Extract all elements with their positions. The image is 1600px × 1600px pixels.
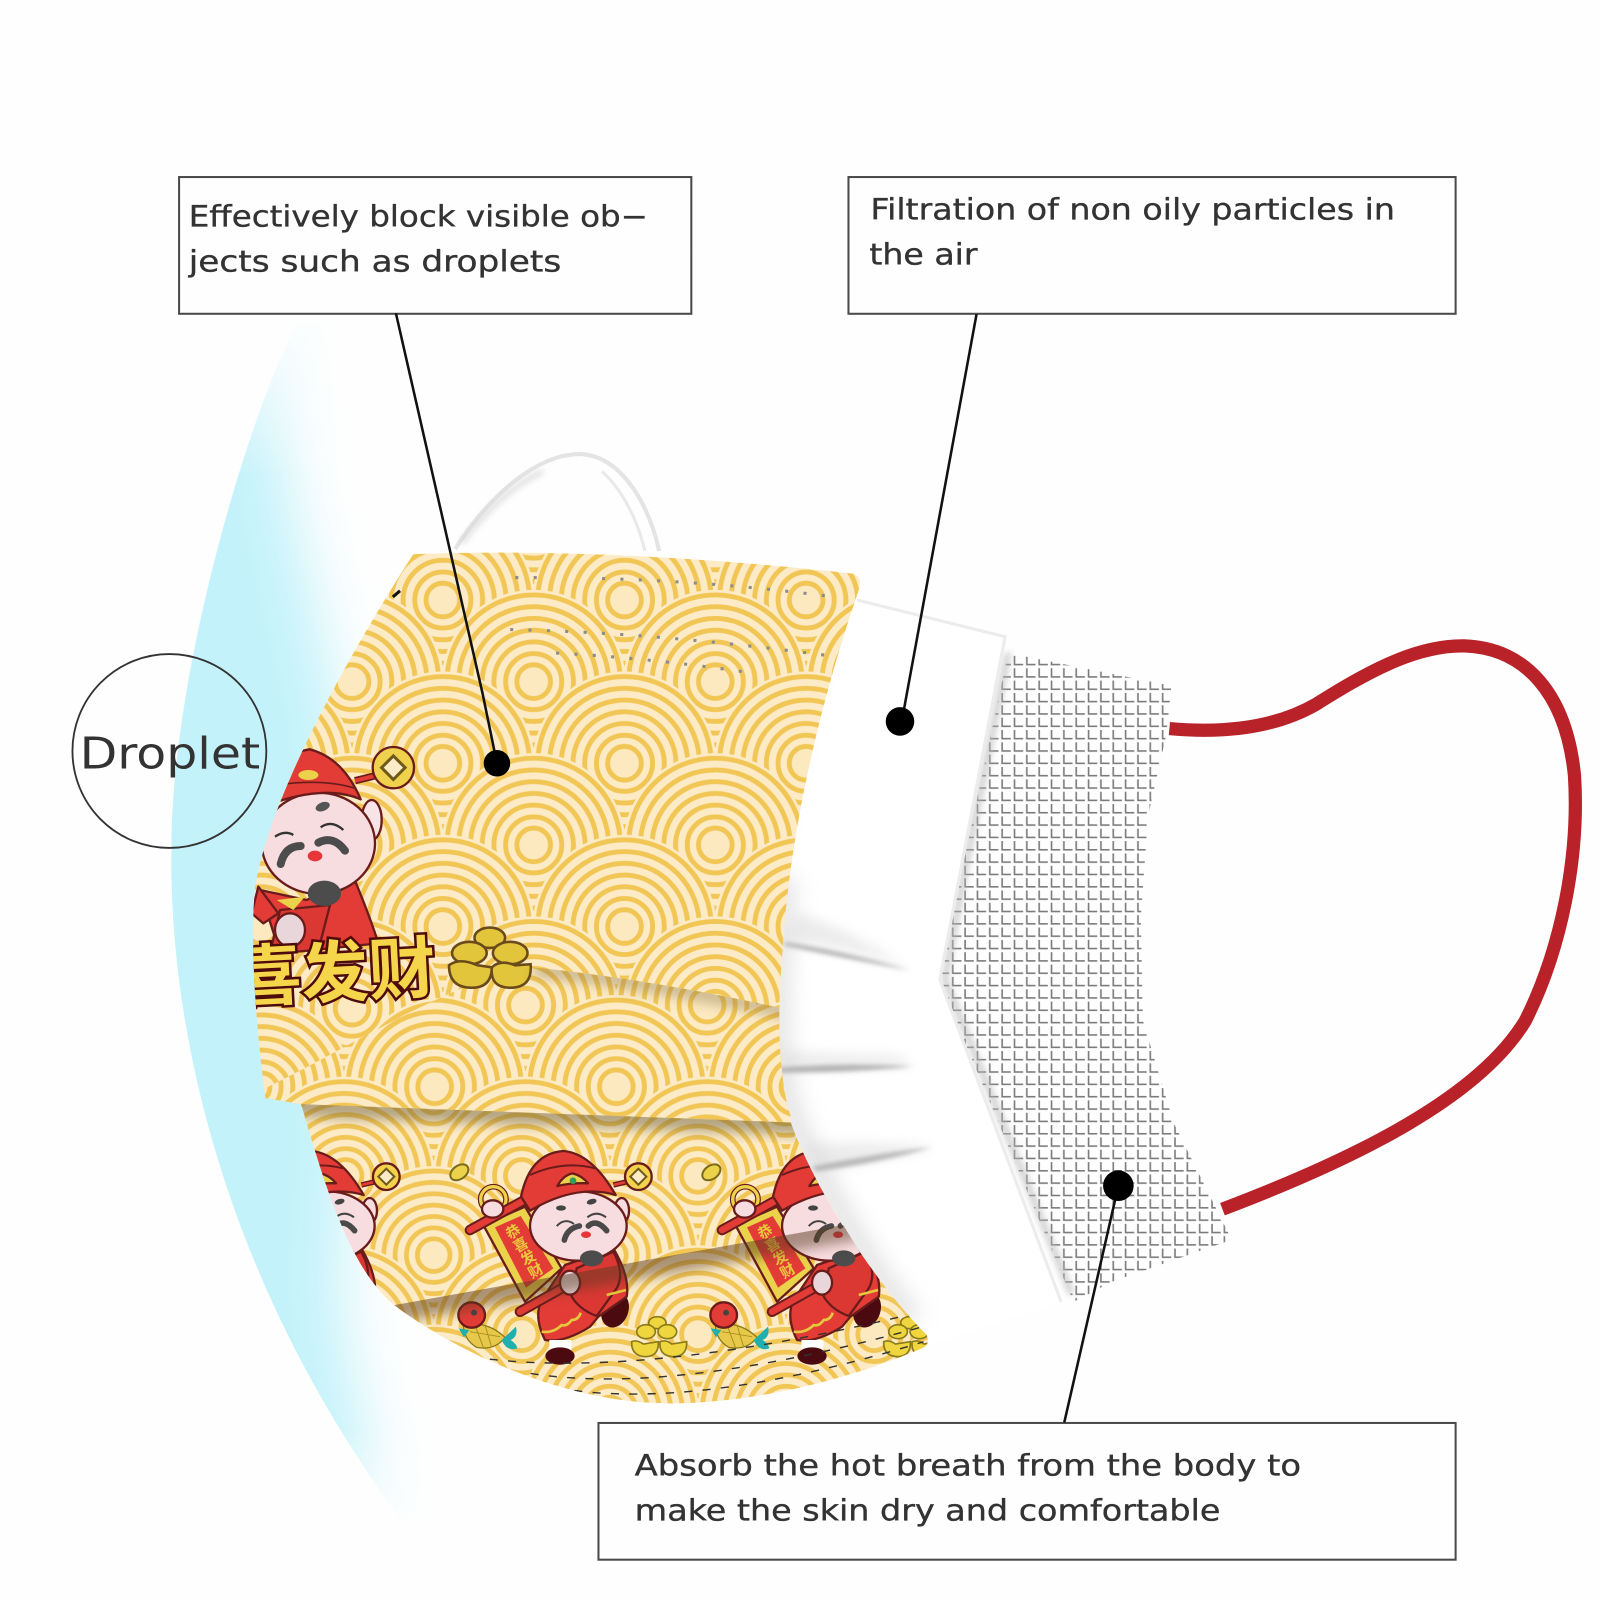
droplet blue spray xyxy=(171,204,776,1592)
stitching dots xyxy=(510,578,847,673)
middle layer: white filter xyxy=(778,600,1061,1347)
large god of wealth figure xyxy=(252,747,414,953)
callout: outer layer box xyxy=(179,177,691,314)
leader line: filter layer xyxy=(886,314,977,736)
callout: outer layer box: jects such as droplets xyxy=(188,244,561,278)
gold ingots upper xyxy=(449,928,531,988)
shadow under middle fold xyxy=(291,1106,806,1124)
callout: filter layer box: Filtration of non oily particles in xyxy=(870,192,1395,226)
leader line: outer layer xyxy=(396,313,510,777)
leader line: inner layer xyxy=(1064,1170,1134,1422)
outer layer: yellow patterned mask xyxy=(253,552,928,1404)
callout: droplet circle: Droplet xyxy=(80,728,260,779)
lower panel figures xyxy=(195,1106,939,1365)
callout: inner layer box: Absorb the hot breath from the body to xyxy=(635,1449,1301,1483)
callout: droplet circle xyxy=(72,654,266,848)
callout: inner layer box: make the skin dry and comfortable xyxy=(635,1493,1220,1527)
callout: outer layer box: Effectively block visible ob− xyxy=(189,200,648,234)
fold shadow upper xyxy=(534,969,791,1012)
pleat shadows xyxy=(780,913,933,1171)
inner layer: grey mesh xyxy=(939,653,1232,1302)
callout: filter layer box: the air xyxy=(869,237,978,271)
callout: inner layer box xyxy=(598,1423,1456,1560)
fold shadow lower xyxy=(378,1224,857,1310)
callout: filter layer box xyxy=(848,177,1456,314)
lucky text: 喜发财 xyxy=(231,914,438,1022)
red ear strap xyxy=(1169,646,1575,1209)
ear loop: white strap xyxy=(455,454,659,551)
bottom stitching xyxy=(490,1311,923,1394)
